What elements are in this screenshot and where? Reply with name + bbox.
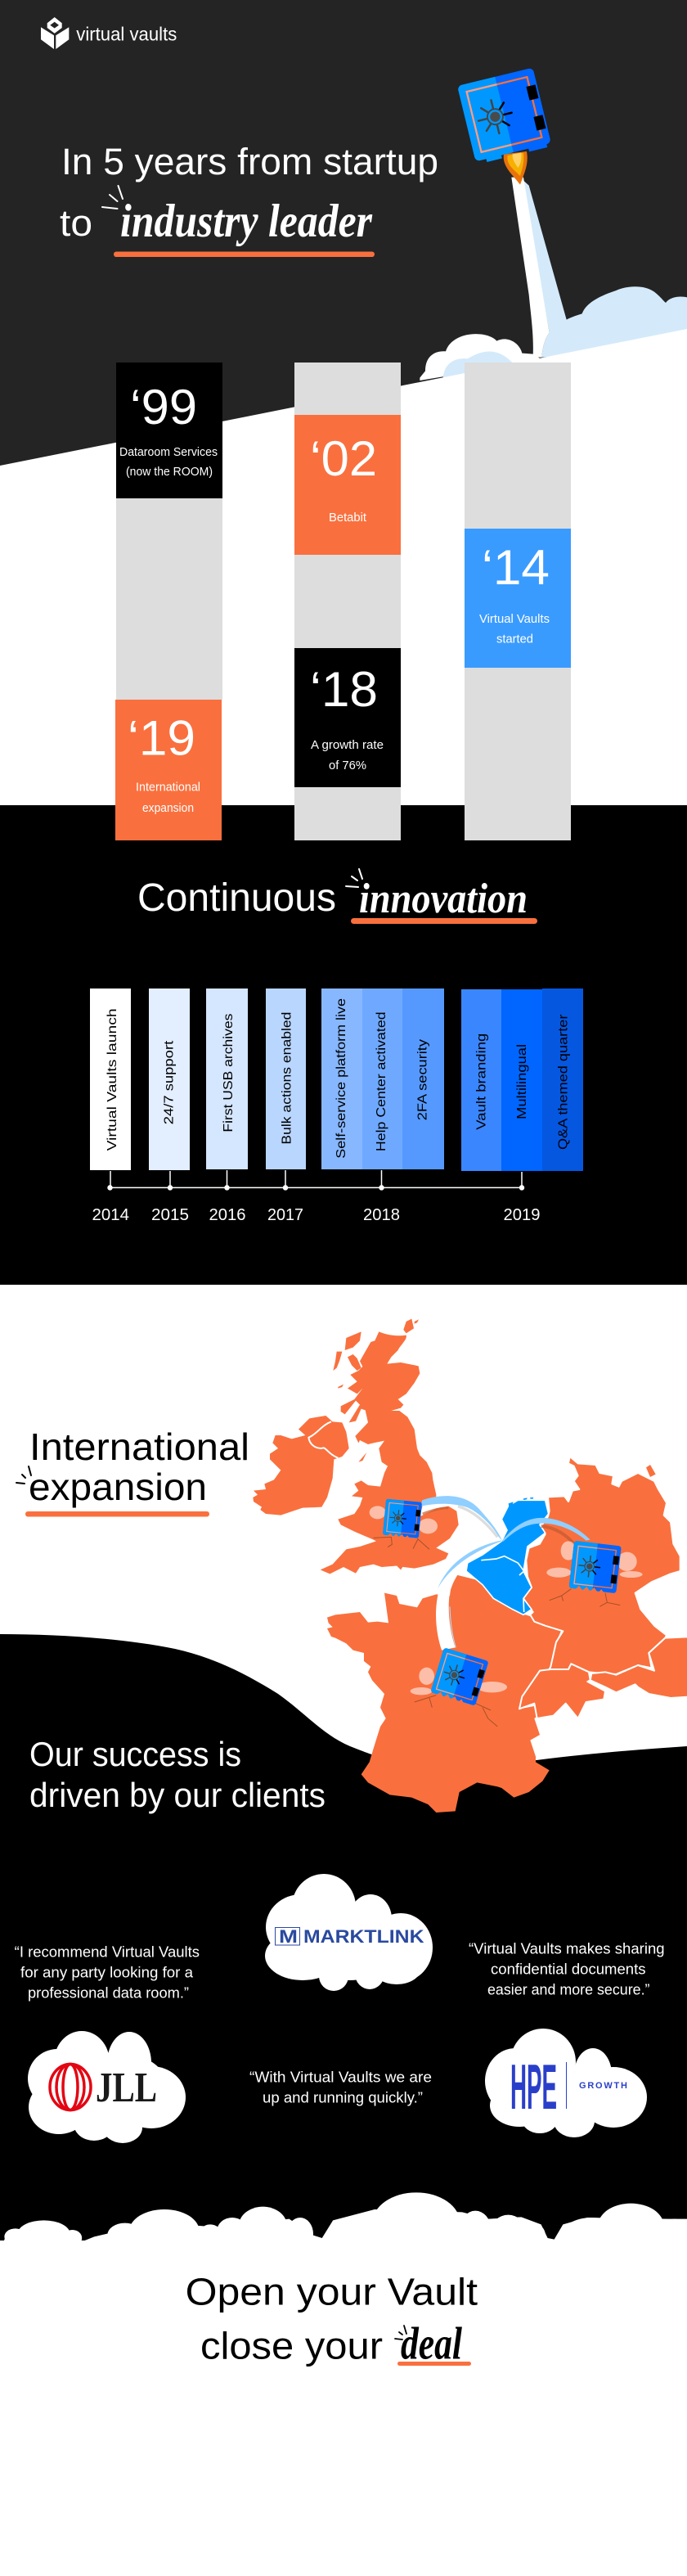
map: Netherlands, Belgium, Luxembourg [466, 1500, 549, 1615]
map: Great Britain and Ireland [253, 1319, 459, 1574]
heading: continuous innovation: innovation [359, 876, 528, 922]
milestone: 2015 [149, 989, 190, 1170]
map: Germany, Switzerland and Austria [519, 1457, 687, 1718]
heading: continuous innovation: Continuous [137, 876, 336, 920]
logo rings [50, 2064, 91, 2110]
sparkle marks [346, 869, 362, 887]
map: Scottish and minor islands [333, 1319, 419, 1569]
map: Ireland [253, 1416, 349, 1515]
bar column: 1999 and 2019 [115, 363, 222, 840]
year labels: 2017 [267, 1206, 303, 1224]
card: 2018: A growth rate [311, 739, 384, 752]
heading: international expansion: International [29, 1425, 249, 1468]
card: 1999: ‘99 [130, 380, 197, 435]
arc: United Kingdom [421, 1496, 502, 1541]
client cloud: HPE Growth [485, 2029, 647, 2137]
card: 2014: ‘14 [482, 540, 550, 595]
background: white diagonal wedge [0, 329, 687, 810]
quote: recommend: professional data room.” [28, 1985, 189, 2002]
background: dark top panel [0, 0, 687, 491]
milestone: 2017 [266, 989, 306, 1169]
cloud shape [485, 2029, 647, 2137]
arc: grey inner fold [458, 1506, 497, 1537]
map: Germany [523, 1457, 680, 1674]
title: industry leader [120, 196, 373, 247]
milestone: vault branding [461, 989, 501, 1171]
milestone: vault branding: Vault branding [474, 1034, 489, 1130]
card: 2018 [294, 648, 401, 787]
ground cracks [374, 1537, 620, 1727]
map: Switzerland [519, 1664, 605, 1718]
card: 2002: Betabit [329, 511, 366, 525]
background: white footer panel with cloud edge [0, 2192, 687, 2576]
sparkle marks [16, 1466, 31, 1484]
quote: sharing documents: easier and more secure.” [487, 1982, 650, 1998]
title: to [60, 202, 92, 244]
year labels: 2016 [209, 1206, 245, 1224]
milestone: multilingual [501, 989, 542, 1171]
cloud shape [28, 2031, 186, 2143]
map: Austria [590, 1637, 687, 1698]
heading underline [25, 1511, 209, 1517]
quote: recommend: for any party looking for a [20, 1965, 194, 1981]
milestone: 2015: 24/7 support [163, 1040, 177, 1124]
title underline [114, 252, 375, 257]
quote: up and running: “With Virtual Vaults we are [249, 2069, 432, 2085]
quote: recommend [15, 1944, 200, 2002]
background: black section [0, 805, 687, 1285]
milestone: 2014 [90, 989, 131, 1170]
map: France [327, 1574, 562, 1813]
heading: our success [29, 1735, 326, 1814]
quote: up and running: up and running quickly.” [263, 2089, 423, 2105]
cloud shape [265, 1874, 433, 1991]
quote: recommend: “I recommend Virtual Vaults [15, 1944, 200, 1961]
milestone: 2014: Virtual Vaults launch [106, 1008, 119, 1151]
card: 2018: ‘18 [310, 662, 378, 717]
background: black wave lower section [0, 1634, 687, 2259]
map of western Europe [253, 1319, 687, 1813]
milestone: help center [362, 989, 402, 1169]
closing heading [186, 2271, 478, 2370]
year labels [92, 1206, 540, 1224]
quote: sharing documents [469, 1941, 665, 1998]
milestone: 2016 [206, 989, 248, 1169]
timeline chart [90, 989, 583, 1224]
card: 2002 [294, 415, 401, 555]
flame [504, 151, 528, 185]
heading: international expansion: expansion [29, 1466, 207, 1508]
icon: flying safe with flame [457, 68, 552, 185]
bar column: 2002 and 2018 [294, 363, 401, 840]
year labels: 2015 [151, 1206, 189, 1224]
arc: shadow on Germany [541, 1526, 574, 1544]
quote: sharing documents: confidential documents [491, 1961, 646, 1978]
quote: sharing documents: “Virtual Vaults makes sharing [469, 1941, 665, 1957]
card: 2019: International [136, 781, 200, 794]
client cloud: JLL [28, 2031, 186, 2143]
milestone: 2FA security [402, 989, 444, 1169]
icon: virtual vaults cube [41, 17, 69, 49]
icon: safe in United Kingdom [383, 1499, 422, 1538]
illustration: rocket trail and smoke clouds [420, 178, 687, 381]
heading underline [351, 918, 537, 924]
logo mark [275, 1928, 299, 1945]
map: Benelux and arcs [370, 1496, 643, 1727]
card: 2014: Virtual Vaults [479, 613, 550, 626]
client cloud: Marktlink: M [279, 1926, 298, 1947]
card: 2019: expansion [142, 802, 194, 815]
heading: continuous innovation [137, 869, 537, 924]
bar column: 2014 [465, 363, 571, 840]
heading underline [397, 2362, 471, 2366]
card: 1999: (now the ROOM) [126, 466, 213, 479]
map: Baltic island [646, 1465, 656, 1477]
card: 1999: Dataroom Services [119, 446, 218, 459]
heading: international expansion [16, 1425, 249, 1517]
icon: safe in France [430, 1647, 489, 1706]
year labels: 2019 [504, 1206, 540, 1224]
icon: safe in Germany [569, 1541, 622, 1594]
timeline axis [108, 1170, 523, 1190]
quote: up and running [249, 2069, 432, 2105]
logo [41, 17, 177, 49]
closing heading: Open your Vault [186, 2271, 478, 2313]
milestone: 2017: Bulk actions enabled [281, 1012, 294, 1145]
heading: our success: driven by our clients [29, 1776, 326, 1814]
title [60, 141, 438, 257]
title: In 5 years from startup [61, 141, 438, 182]
sparkle marks [102, 186, 123, 209]
milestone: Q&A quarter: Q&A themed quarter [557, 1014, 571, 1150]
arc: shadow on Great Britain [423, 1508, 448, 1514]
arc: France [436, 1541, 501, 1651]
logo: virtual vaults [76, 23, 177, 44]
client cloud: Marktlink: MARKTLINK [303, 1926, 424, 1947]
client cloud: Marktlink [265, 1874, 433, 1991]
year labels: 2018 [363, 1206, 400, 1224]
milestone: help center: Help Center activated [375, 1011, 388, 1151]
sparkle marks [395, 2326, 406, 2340]
closing heading: close your [200, 2325, 383, 2367]
client cloud: JLL: JLL [96, 2065, 157, 2111]
milestone: 2016: First USB archives [222, 1014, 236, 1133]
smoke puffs [370, 1506, 643, 1695]
milestone: self-service platform [321, 989, 362, 1169]
milestone: 2FA security: 2FA security [416, 1039, 430, 1120]
closing heading: deal [401, 2319, 462, 2370]
card: 1999 [116, 363, 222, 498]
milestone: self-service platform: Self-service platform live [335, 998, 348, 1159]
card: 2019: ‘19 [128, 710, 195, 766]
heading: our success: Our success is [29, 1735, 241, 1773]
card: 2019 [115, 700, 222, 840]
card: 2002: ‘02 [310, 431, 377, 486]
card: 2014: started [496, 633, 533, 646]
card: 2018: of 76% [329, 759, 366, 772]
milestone: Q&A quarter [542, 989, 583, 1171]
client cloud: HPE Growth: HPE [510, 2051, 557, 2123]
milestone: multilingual: Multilingual [515, 1044, 529, 1119]
card: 2014 [465, 529, 571, 668]
year labels: 2014 [92, 1206, 129, 1224]
map: Great Britain [321, 1331, 459, 1574]
arc: Germany [502, 1518, 590, 1542]
client cloud: HPE Growth: GROWTH [579, 2081, 627, 2091]
